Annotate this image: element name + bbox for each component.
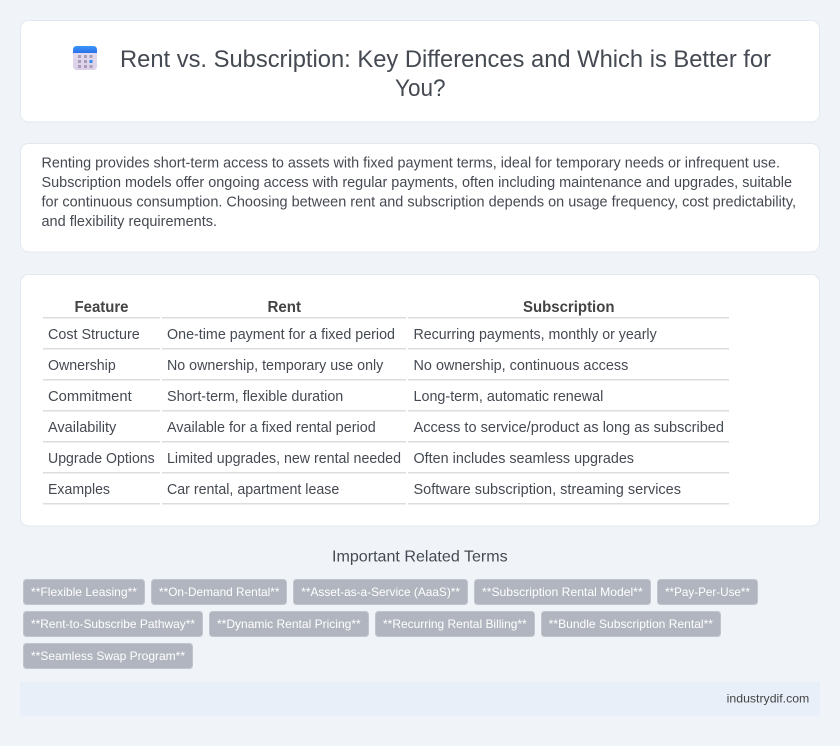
row: commitment (48, 389, 603, 405)
row: commitment: Short-term, flexible duration (167, 389, 343, 405)
footer: industrydif.com (727, 692, 809, 706)
table header row: Feature (74, 299, 129, 316)
tag: **Bundle Subscription Rental** (549, 617, 713, 631)
row: examples: Examples (48, 482, 110, 498)
heading: important related terms: Important Related Terms (332, 548, 508, 566)
table header row (74, 299, 614, 316)
row: availability: Availability (48, 420, 117, 436)
tag: **Seamless Swap Program** (31, 649, 185, 663)
row: upgrade options (48, 451, 634, 467)
text block: introduction: Renting provides short-term access to assets with fixed payment terms, ideal for temporary needs or infrequent use. (42, 156, 780, 172)
panel: comparison table (20, 274, 820, 526)
row: cost structure: Cost Structure (48, 327, 140, 343)
tag: **Flexible Leasing** (31, 585, 137, 599)
panel: introduction (20, 144, 820, 252)
row: cost structure: Recurring payments, monthly or yearly (414, 327, 658, 343)
text block: introduction (42, 156, 796, 230)
tag (24, 580, 144, 604)
table header row: Rent (268, 299, 302, 316)
tag: **On-Demand Rental** (159, 585, 280, 599)
row: availability: Access to service/product as long as subscribed (414, 420, 724, 436)
table header row: Subscription (523, 299, 614, 316)
row: upgrade options: Limited upgrades, new rental needed (167, 451, 401, 467)
footer (20, 682, 820, 716)
row: examples: Software subscription, streaming services (414, 482, 681, 498)
title (120, 46, 771, 102)
row: commitment: Long-term, automatic renewal (414, 389, 603, 405)
title: You? (395, 75, 446, 102)
text block: introduction: and flexibility requirements. (42, 214, 217, 230)
panel: header (20, 20, 820, 122)
related terms tags (24, 580, 758, 668)
row: ownership: No ownership, temporary use only (167, 358, 384, 374)
tag (376, 612, 534, 636)
row: availability: Available for a fixed rental period (167, 420, 376, 436)
tag (542, 612, 720, 636)
icon: calendar (73, 46, 97, 70)
tag: **Dynamic Rental Pricing** (217, 617, 361, 631)
tag (210, 612, 368, 636)
tag (474, 580, 650, 604)
row: examples: Car rental, apartment lease (167, 482, 339, 498)
tag (24, 644, 192, 668)
row: examples (48, 482, 681, 498)
row: cost structure: One-time payment for a fixed period (167, 327, 395, 343)
row: availability (48, 420, 724, 436)
row: cost structure (48, 327, 658, 343)
row: upgrade options: Often includes seamless upgrades (414, 451, 634, 467)
row: upgrade options: Upgrade Options (48, 451, 155, 467)
tag (294, 580, 468, 604)
tag: **Pay-Per-Use** (665, 585, 750, 599)
tag (658, 580, 758, 604)
text block: introduction: Subscription models offer ongoing access with regular payments, often including maintenance and upgrades, suitable (42, 175, 792, 191)
tag: **Asset-as-a-Service (AaaS)** (301, 585, 460, 599)
tag (24, 612, 202, 636)
title: Rent vs. Subscription: Key Differences and Which is Better for (120, 46, 771, 73)
text block: introduction: for continuous consumption. Choosing between rent and subscription depends on usage frequency, cost predictability, (42, 194, 796, 210)
row: commitment: Commitment (48, 389, 132, 405)
tag (152, 580, 286, 604)
row: ownership: Ownership (48, 358, 116, 374)
tag: **Rent-to-Subscribe Pathway** (31, 617, 195, 631)
tag: **Subscription Rental Model** (482, 585, 643, 599)
row: ownership: No ownership, continuous access (414, 358, 628, 374)
tag: **Recurring Rental Billing** (383, 617, 527, 631)
row: ownership (48, 358, 628, 374)
